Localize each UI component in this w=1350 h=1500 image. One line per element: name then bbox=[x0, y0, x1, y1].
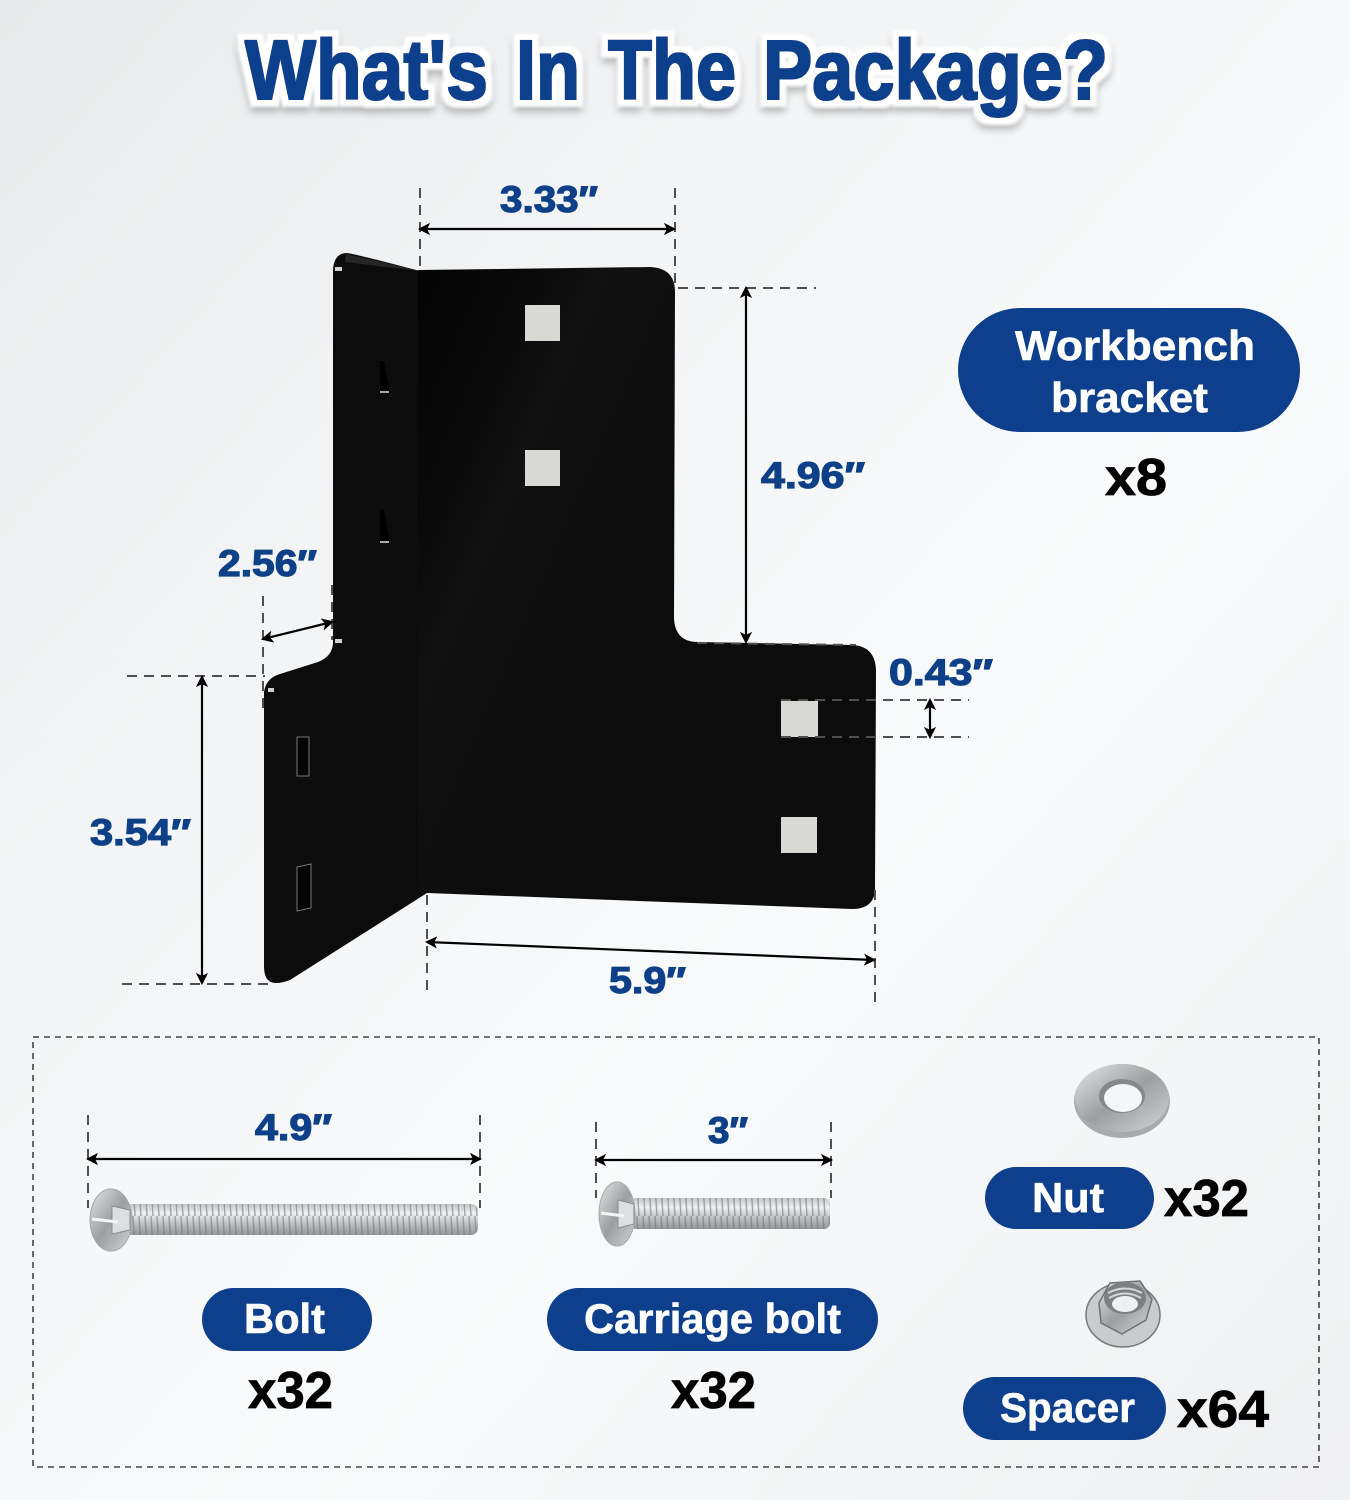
dimension: 5.9: 5.9″ bbox=[609, 960, 686, 1001]
square hole bbox=[525, 450, 560, 486]
dimension: 0.43: 0.43″ bbox=[889, 652, 993, 693]
pill: nut: Nut bbox=[1032, 1174, 1104, 1221]
pill: spacer: Spacer bbox=[1000, 1384, 1135, 1431]
title: In bbox=[516, 23, 580, 117]
square hole bbox=[781, 817, 817, 853]
icon: long bolt bbox=[90, 1189, 478, 1251]
parts panel bbox=[33, 1037, 1319, 1467]
dimension: 2.56 bbox=[218, 543, 332, 710]
title: Package? bbox=[763, 23, 1108, 117]
side flange bbox=[264, 253, 427, 983]
pill: carriage bolt bbox=[547, 1288, 878, 1351]
dimension: 2.56: 2.56″ bbox=[218, 543, 317, 584]
quantity bolt: x32 bbox=[248, 1362, 333, 1420]
title: What's bbox=[245, 23, 488, 117]
dimension: 4.9: 4.9″ bbox=[255, 1107, 332, 1148]
pill: carriage bolt: Carriage bolt bbox=[584, 1295, 841, 1342]
quantity x8: x8 bbox=[1105, 449, 1167, 507]
pill: spacer bbox=[963, 1377, 1166, 1440]
pill: workbench bracket: bracket bbox=[1051, 374, 1208, 421]
title: The bbox=[608, 23, 736, 117]
quantity nut: x32 bbox=[1164, 1170, 1249, 1228]
bracket photo bbox=[264, 253, 876, 983]
slot bbox=[380, 510, 390, 543]
quantity carriage bolt: x32 bbox=[671, 1362, 756, 1420]
slot bbox=[297, 864, 311, 911]
pill: workbench bracket bbox=[958, 308, 1300, 432]
dimension: 3: 3″ bbox=[708, 1110, 748, 1151]
title bbox=[245, 23, 1108, 117]
corner glints bbox=[268, 267, 342, 692]
back plate bbox=[418, 267, 876, 909]
dimension: 3.33: 3.33″ bbox=[500, 179, 598, 220]
square hole bbox=[525, 305, 560, 341]
pill: nut bbox=[985, 1167, 1154, 1229]
dimension: 4.96: 4.96″ bbox=[761, 455, 865, 496]
pill: bolt bbox=[202, 1288, 372, 1351]
slot bbox=[297, 737, 309, 776]
icon: flange nut bbox=[1086, 1281, 1160, 1347]
fold shading bbox=[345, 254, 420, 271]
icon: carriage bolt bbox=[599, 1182, 830, 1246]
square hole bbox=[781, 701, 818, 737]
icon: washer bbox=[1074, 1064, 1170, 1138]
pill: bolt: Bolt bbox=[244, 1295, 325, 1342]
dimension: 5.9 bbox=[427, 890, 875, 1003]
dimension: 3.54: 3.54″ bbox=[90, 812, 191, 853]
quantity spacer: x64 bbox=[1177, 1381, 1269, 1439]
slot bbox=[380, 361, 390, 393]
pill: workbench bracket: Workbench bbox=[1015, 322, 1255, 369]
